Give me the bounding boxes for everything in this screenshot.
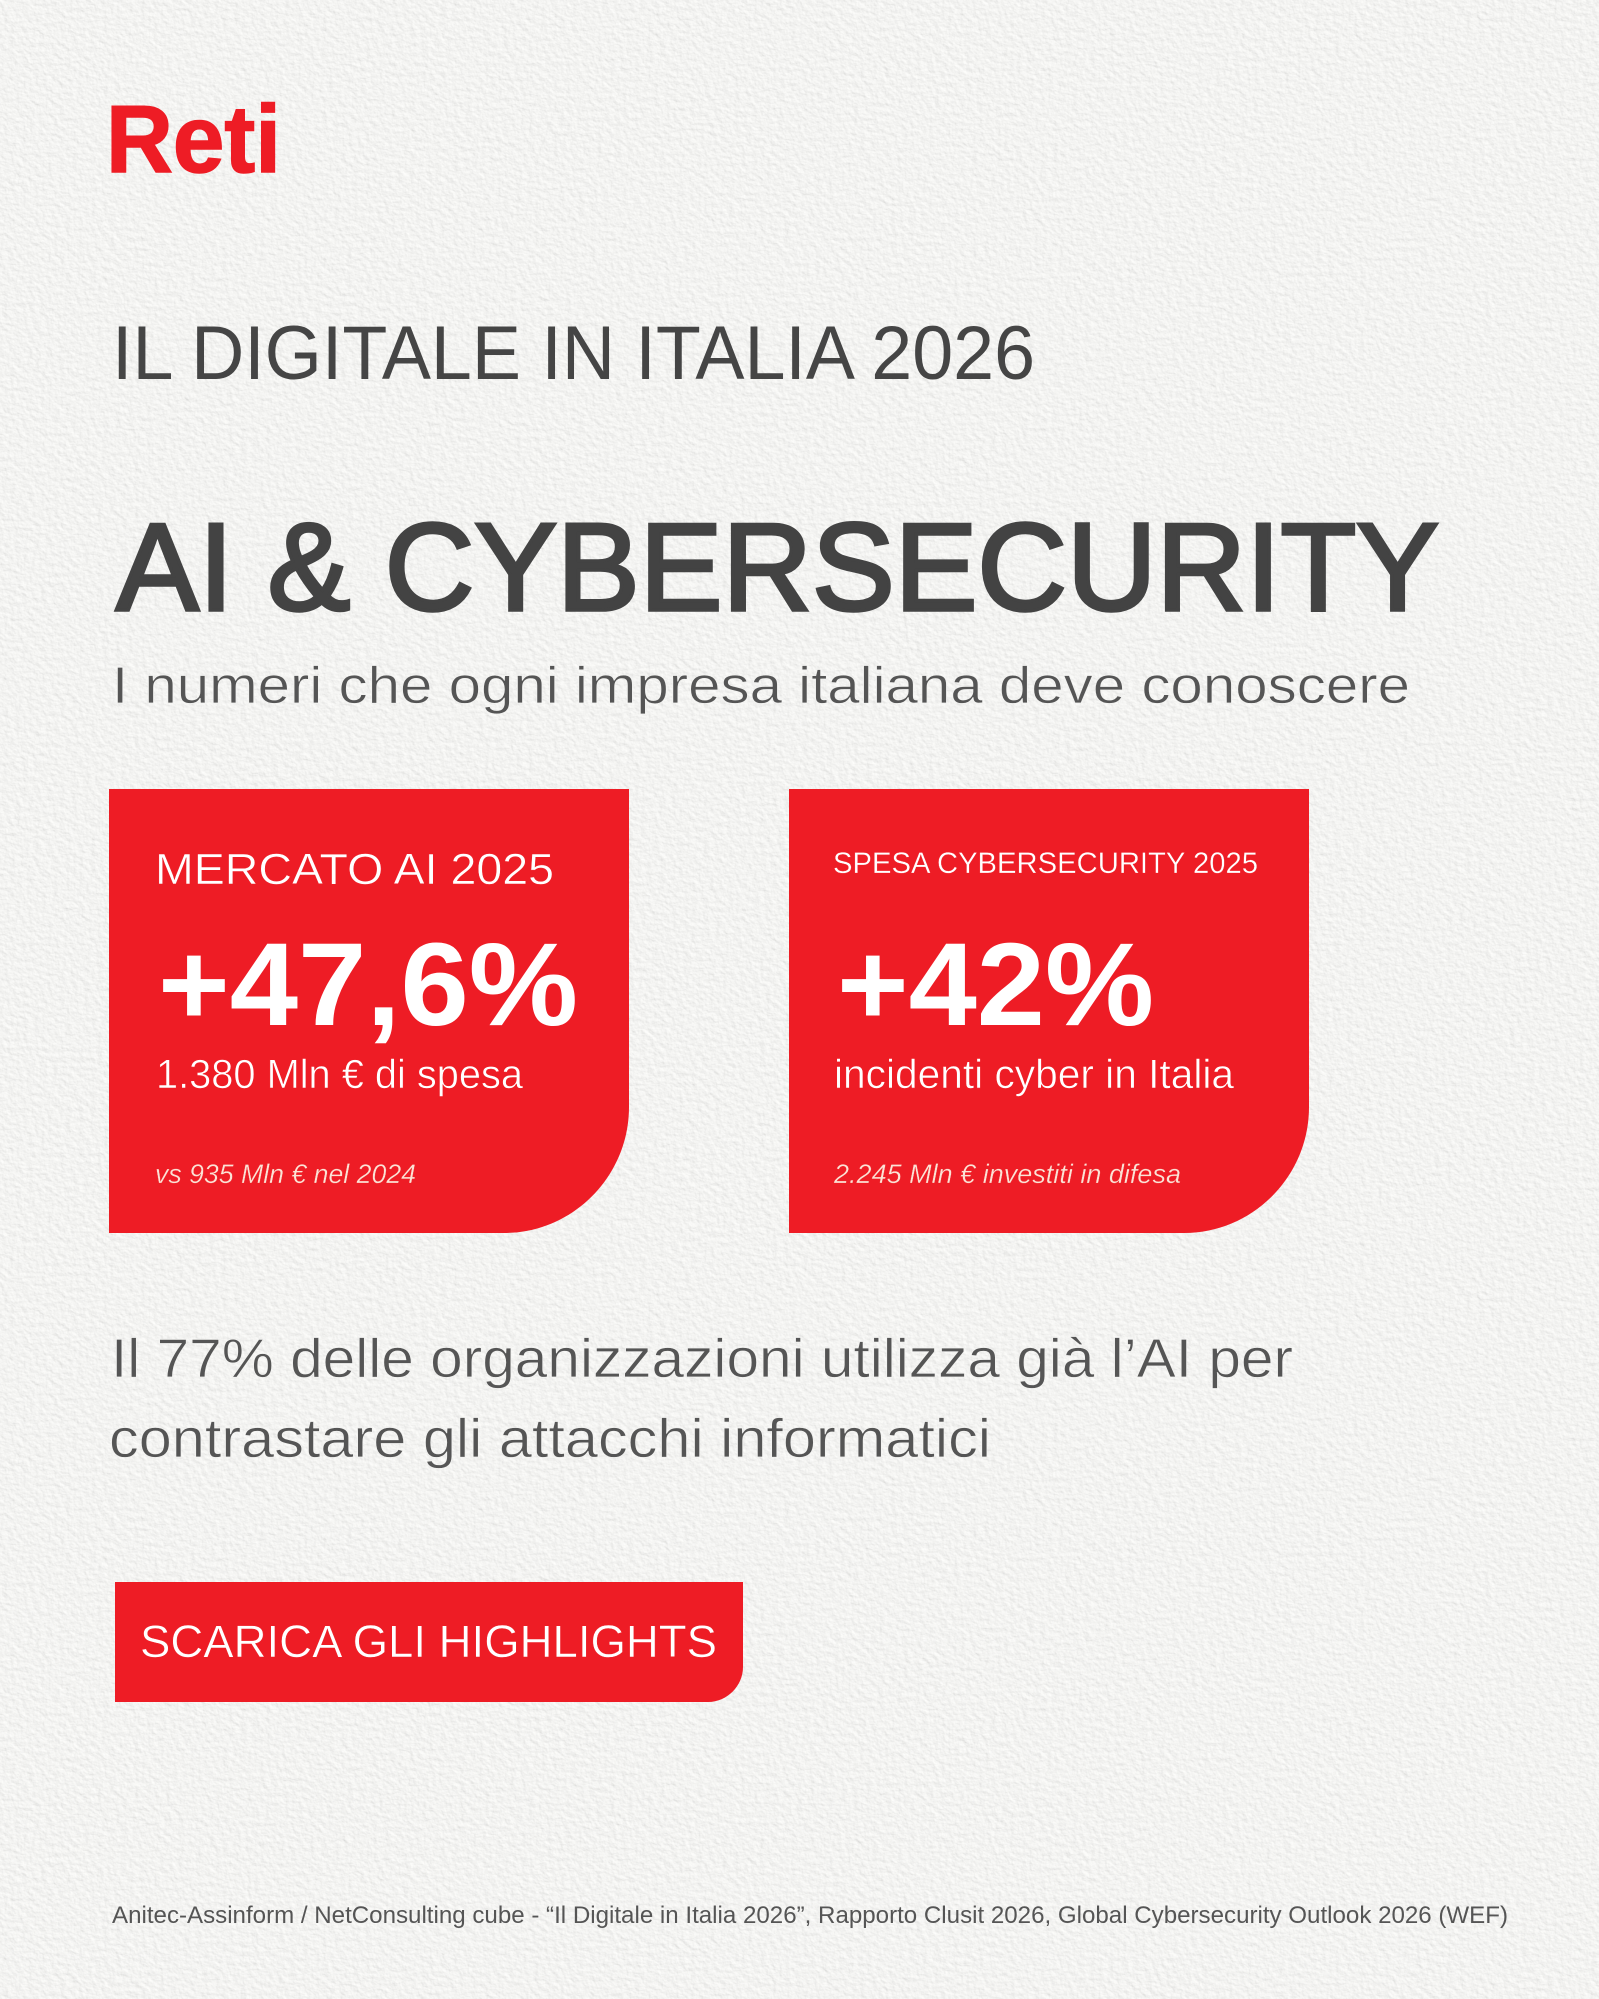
card shape: [789, 789, 1309, 1233]
big number: +47,6%: [158, 919, 578, 1051]
card detail: 1.380 Mln € di spesa: [156, 1051, 523, 1097]
card detail: incidenti cyber in Italia: [834, 1051, 1234, 1097]
statement text: Il 77% delle organizzazioni utilizza già l’AI per: [111, 1327, 1293, 1389]
card shape: [109, 789, 629, 1233]
card note: vs 935 Mln € nel 2024: [155, 1159, 416, 1189]
title: AI & Cybersecurity: AI & CYBERSECURITY: [116, 499, 1439, 637]
logo: Reti: Reti: [106, 86, 281, 193]
source footer: Anitec-Assinform / NetConsulting cube - “Il Digitale in Italia 2026”, Rapporto Clusit 2026, Global Cybersecurity Outlook 2026 (WEF): [112, 1902, 1508, 1929]
big number: +42%: [837, 919, 1154, 1051]
heading: Il Digitale in Italia 2026: IL DIGITALE IN ITALIA 2026: [112, 311, 1035, 396]
statement text: [109, 1327, 1293, 1469]
card label: SPESA CYBERSECURITY 2025: [833, 847, 1258, 880]
panel: mercato AI: [109, 789, 629, 1233]
subtitle: I numeri che ogni impresa italiana deve conoscere: [112, 657, 1410, 715]
call to action button: [115, 1582, 743, 1702]
card note: 2.245 Mln € investiti in difesa: [833, 1159, 1181, 1189]
card label: MERCATO AI 2025: [155, 845, 554, 894]
call to action button: SCARICA GLI HIGHLIGHTS: [140, 1616, 717, 1667]
statement text: contrastare gli attacchi informatici: [109, 1407, 991, 1469]
panel: spesa cybersecurity: [789, 789, 1309, 1233]
